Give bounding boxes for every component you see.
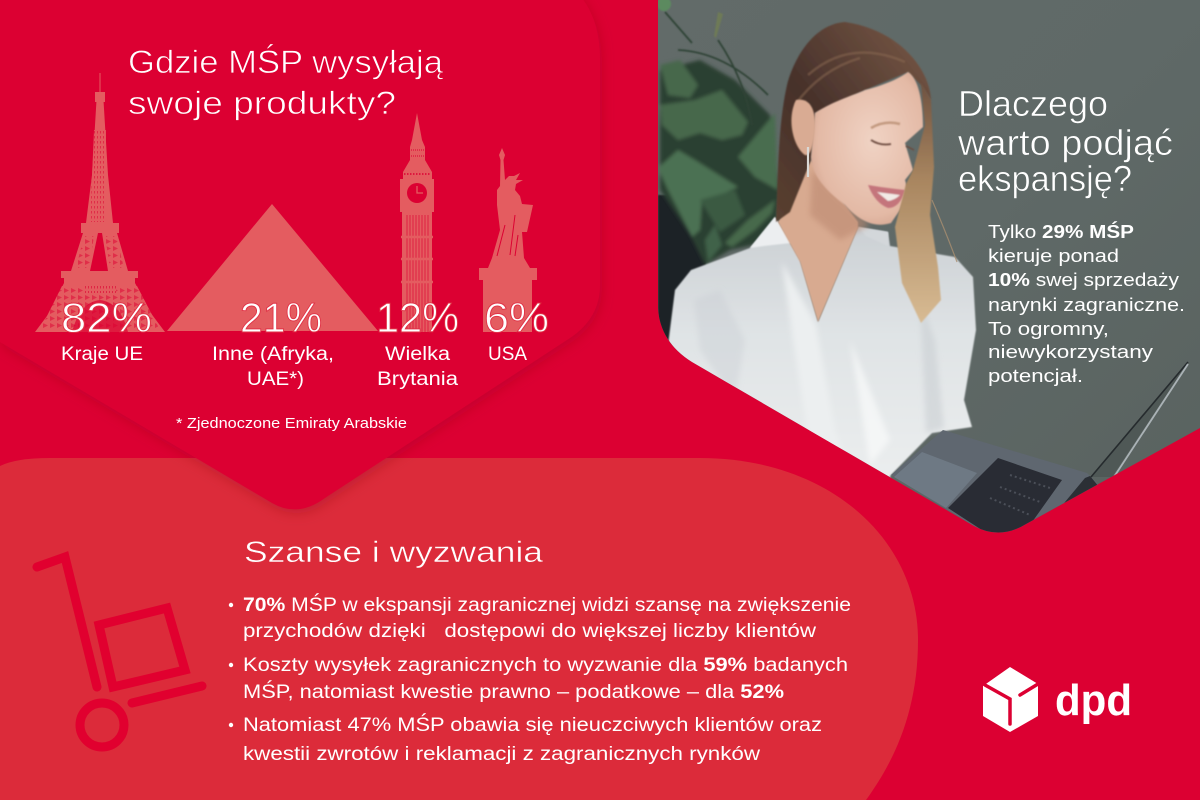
- icon: Big Ben: [400, 113, 434, 332]
- text block: why expand: narynki zagraniczne.: [988, 294, 1185, 315]
- bullet 3: kwestii zwrotów i reklamacji z zagranicznych rynków: [243, 744, 760, 765]
- icon: Statue of Liberty: [479, 148, 537, 332]
- icon: Eiffel tower: [35, 73, 165, 332]
- bullet 3: Natomiast 47% MŚP obawia się nieuczciwych klientów oraz: [243, 714, 822, 736]
- logo: dpd: [983, 667, 1132, 732]
- heading: why expand: [957, 83, 1173, 199]
- dark area behind the plant: [658, 195, 706, 345]
- face: [811, 72, 923, 225]
- neck: [778, 160, 858, 322]
- icon: pyramid: [167, 204, 378, 331]
- collar: [750, 217, 888, 248]
- photo: woman with laptop: [650, 0, 1200, 545]
- stats row: [61, 294, 549, 390]
- shirt: [668, 216, 977, 478]
- stats row: 6%: [484, 294, 549, 341]
- stats row: Brytania: [377, 369, 459, 390]
- bullet 3: [229, 714, 822, 765]
- ear: [791, 100, 815, 155]
- list: opportunities and challenges: [229, 594, 851, 765]
- earring: [807, 147, 809, 177]
- text block: why expand: potencjał.: [988, 365, 1083, 386]
- bullet 2: [229, 655, 848, 703]
- heading: destinations: Gdzie MŚP wysyłają: [128, 44, 443, 80]
- bullet 1: przychodów dzięki dostępowi do większej liczby klientów: [243, 621, 816, 642]
- text block: why expand: To ogromny,: [988, 318, 1109, 339]
- stats row: UAE*): [247, 369, 304, 390]
- heading: why expand: ekspansję?: [958, 158, 1132, 199]
- shirt placket and folds: [702, 268, 944, 458]
- stats row: 82%: [61, 294, 152, 341]
- stats row: Wielka: [385, 344, 450, 365]
- blond hair on the right: [895, 83, 941, 323]
- text block: why expand: niewykorzystany: [988, 341, 1154, 362]
- logo: dpd: dpd: [1055, 676, 1132, 725]
- stats row: 21%: [240, 294, 322, 341]
- icon: hand truck: [37, 557, 202, 747]
- bullet 1: [229, 594, 851, 642]
- back hair over the crown: [776, 22, 931, 222]
- heading: destinations: [128, 44, 443, 121]
- stats row: Inne (Afryka,: [212, 344, 334, 365]
- heading: opportunities and challenges: Szanse i wyzwania: [244, 536, 543, 569]
- plant stems: [658, 0, 769, 96]
- eyes and mouth: [868, 123, 914, 208]
- heading: destinations: swoje produkty?: [128, 85, 396, 121]
- footnote: * Zjednoczone Emiraty Arabskie: [176, 416, 407, 432]
- bullet 1: 70% MŚP w ekspansji zagranicznej widzi szansę na zwiększenie: [243, 594, 851, 616]
- heading: why expand: Dlaczego: [958, 83, 1108, 124]
- text block: why expand: [988, 221, 1185, 386]
- stats row: Kraje UE: [61, 344, 143, 365]
- stats row: 12%: [376, 294, 459, 341]
- heading: why expand: warto podjąć: [957, 122, 1173, 163]
- bullet 2: MŚP, natomiast kwestie prawno – podatkowe – dla 52%: [243, 681, 784, 703]
- panel: challenges background: [0, 458, 918, 800]
- text block: why expand: 10% swej sprzedaży: [988, 269, 1180, 290]
- stats row: USA: [488, 344, 527, 365]
- text block: why expand: Tylko 29% MŚP: [988, 221, 1134, 242]
- plant: [658, 60, 780, 265]
- text block: why expand: kieruje ponad: [988, 245, 1119, 266]
- panel: destinations background: [0, 0, 600, 509]
- bullet 2: Koszty wysyłek zagranicznych to wyzwanie dla 59% badanych: [243, 655, 848, 676]
- laptop: [891, 362, 1188, 535]
